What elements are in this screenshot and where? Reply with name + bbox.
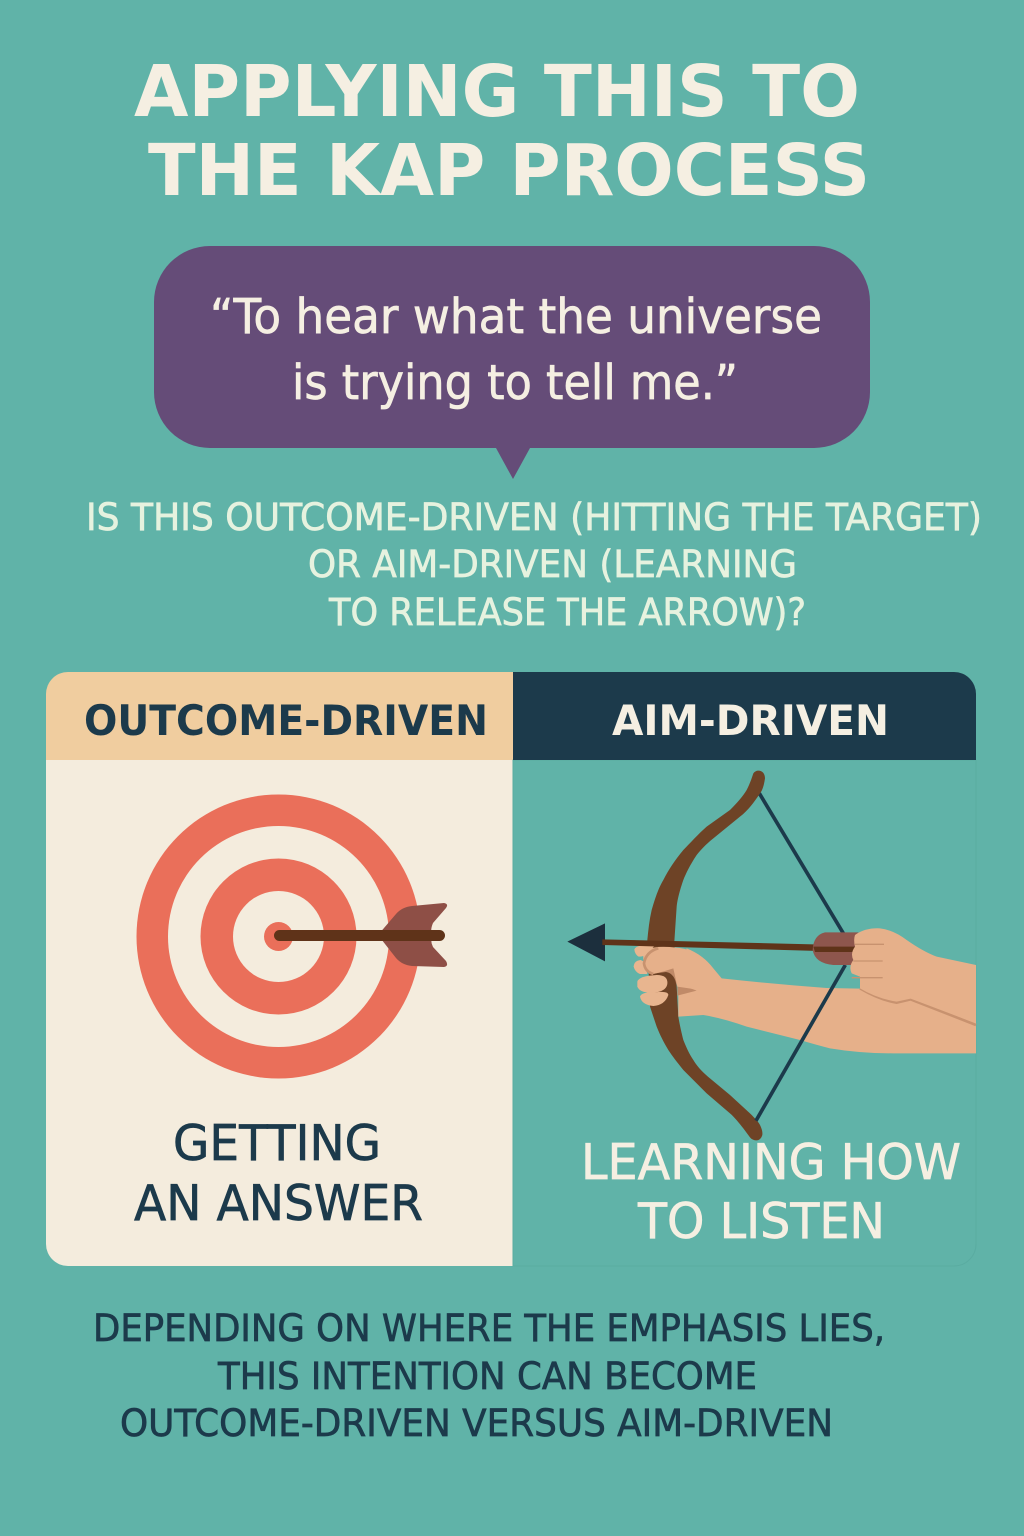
aim header bbox=[513, 672, 976, 760]
aim caption bbox=[581, 1134, 961, 1250]
footer text bbox=[93, 1307, 885, 1445]
title: APPLYING THIS TO bbox=[134, 50, 860, 133]
footer text: DEPENDING ON WHERE THE EMPHASIS LIES, bbox=[93, 1307, 885, 1350]
panel: outcome-driven bbox=[46, 672, 513, 1266]
title: THE KAP PROCESS bbox=[148, 129, 870, 212]
aim caption: TO LISTEN bbox=[637, 1193, 885, 1250]
aim caption: LEARNING HOW bbox=[581, 1134, 961, 1191]
aim heading: AIM-DRIVEN bbox=[612, 696, 889, 745]
icon: bow, arrow and arms bbox=[567, 771, 976, 1140]
question text bbox=[86, 496, 982, 634]
outcome header bbox=[46, 672, 513, 760]
speech bubble: quote: is trying to tell me.” bbox=[292, 355, 738, 411]
question text: OR AIM-DRIVEN (LEARNING bbox=[308, 543, 797, 586]
outcome caption: AN ANSWER bbox=[134, 1175, 423, 1232]
icon: target with arrow bbox=[136, 794, 447, 1078]
outcome caption: GETTING bbox=[173, 1115, 381, 1172]
outcome caption bbox=[134, 1115, 423, 1232]
footer text: THIS INTENTION CAN BECOME bbox=[217, 1355, 757, 1398]
aim panel outline bbox=[513, 760, 976, 1266]
speech bubble: quote: “To hear what the universe bbox=[210, 289, 822, 345]
question text: IS THIS OUTCOME-DRIVEN (HITTING THE TARGET) bbox=[86, 496, 982, 539]
outcome heading: OUTCOME-DRIVEN bbox=[84, 696, 488, 745]
title bbox=[134, 50, 870, 212]
panel: aim-driven bbox=[513, 672, 976, 1266]
question text: TO RELEASE THE ARROW)? bbox=[328, 591, 806, 634]
speech bubble: quote bbox=[154, 246, 870, 479]
outcome panel background bbox=[46, 760, 513, 1266]
footer text: OUTCOME-DRIVEN VERSUS AIM-DRIVEN bbox=[120, 1402, 833, 1445]
